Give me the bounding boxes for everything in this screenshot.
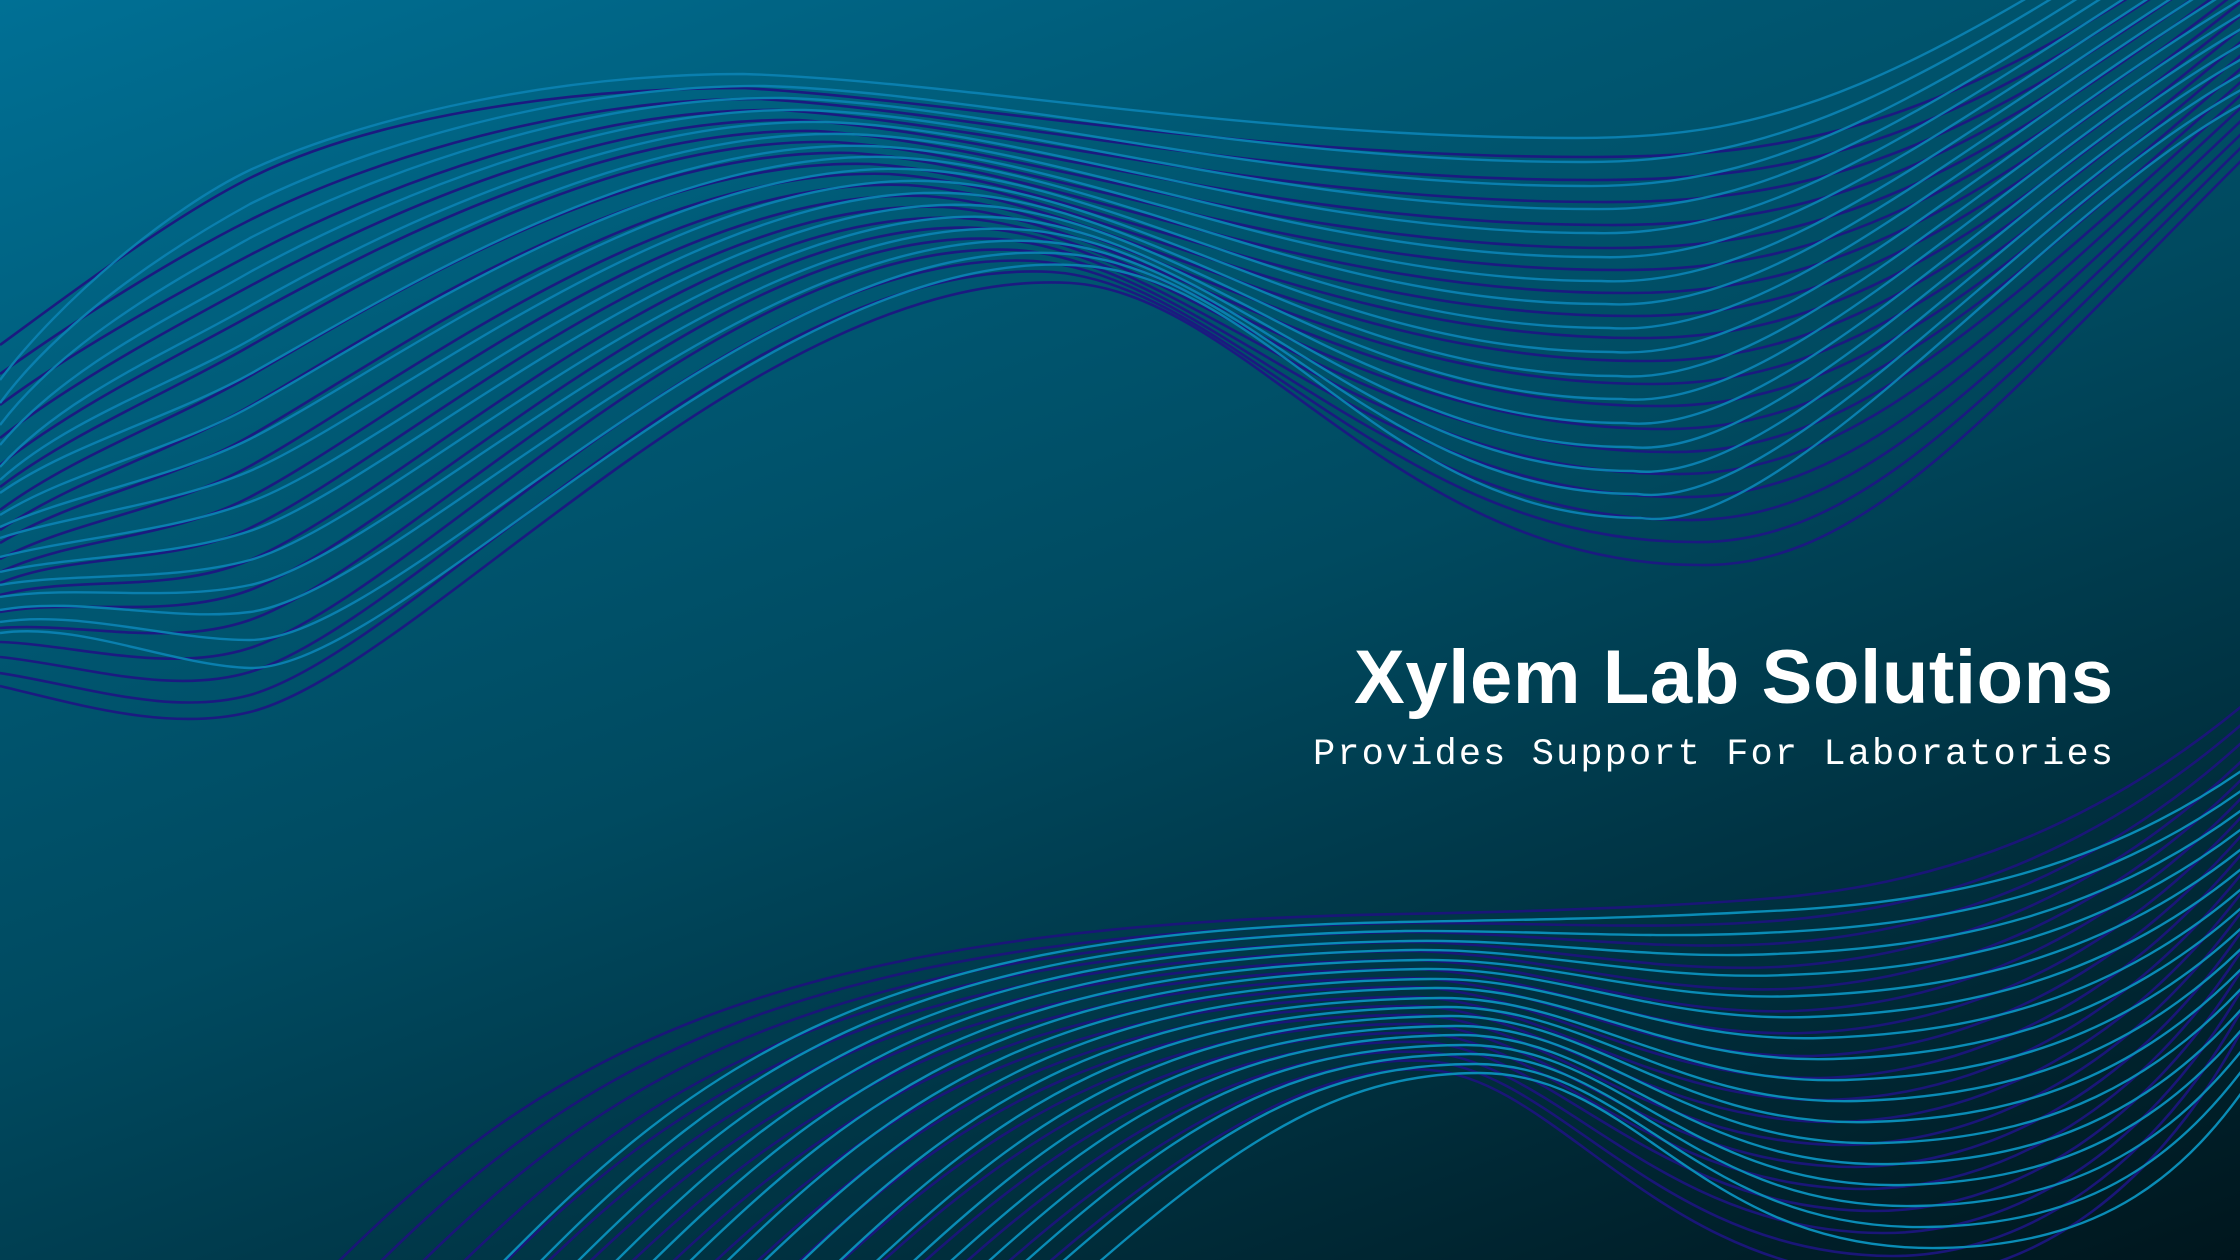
- top wave band: [0, 0, 2240, 719]
- bottom wave: dark lines: [330, 682, 2240, 1260]
- bottom wave: light lines: [495, 750, 2240, 1260]
- top wave: dark lines: [0, 0, 2240, 719]
- bottom wave band: [330, 682, 2240, 1260]
- title: Xylem Lab Solutions: [1354, 635, 2113, 720]
- top wave: light lines: [0, 0, 2240, 668]
- subtitle: Provides Support For Laboratories: [1313, 734, 2113, 776]
